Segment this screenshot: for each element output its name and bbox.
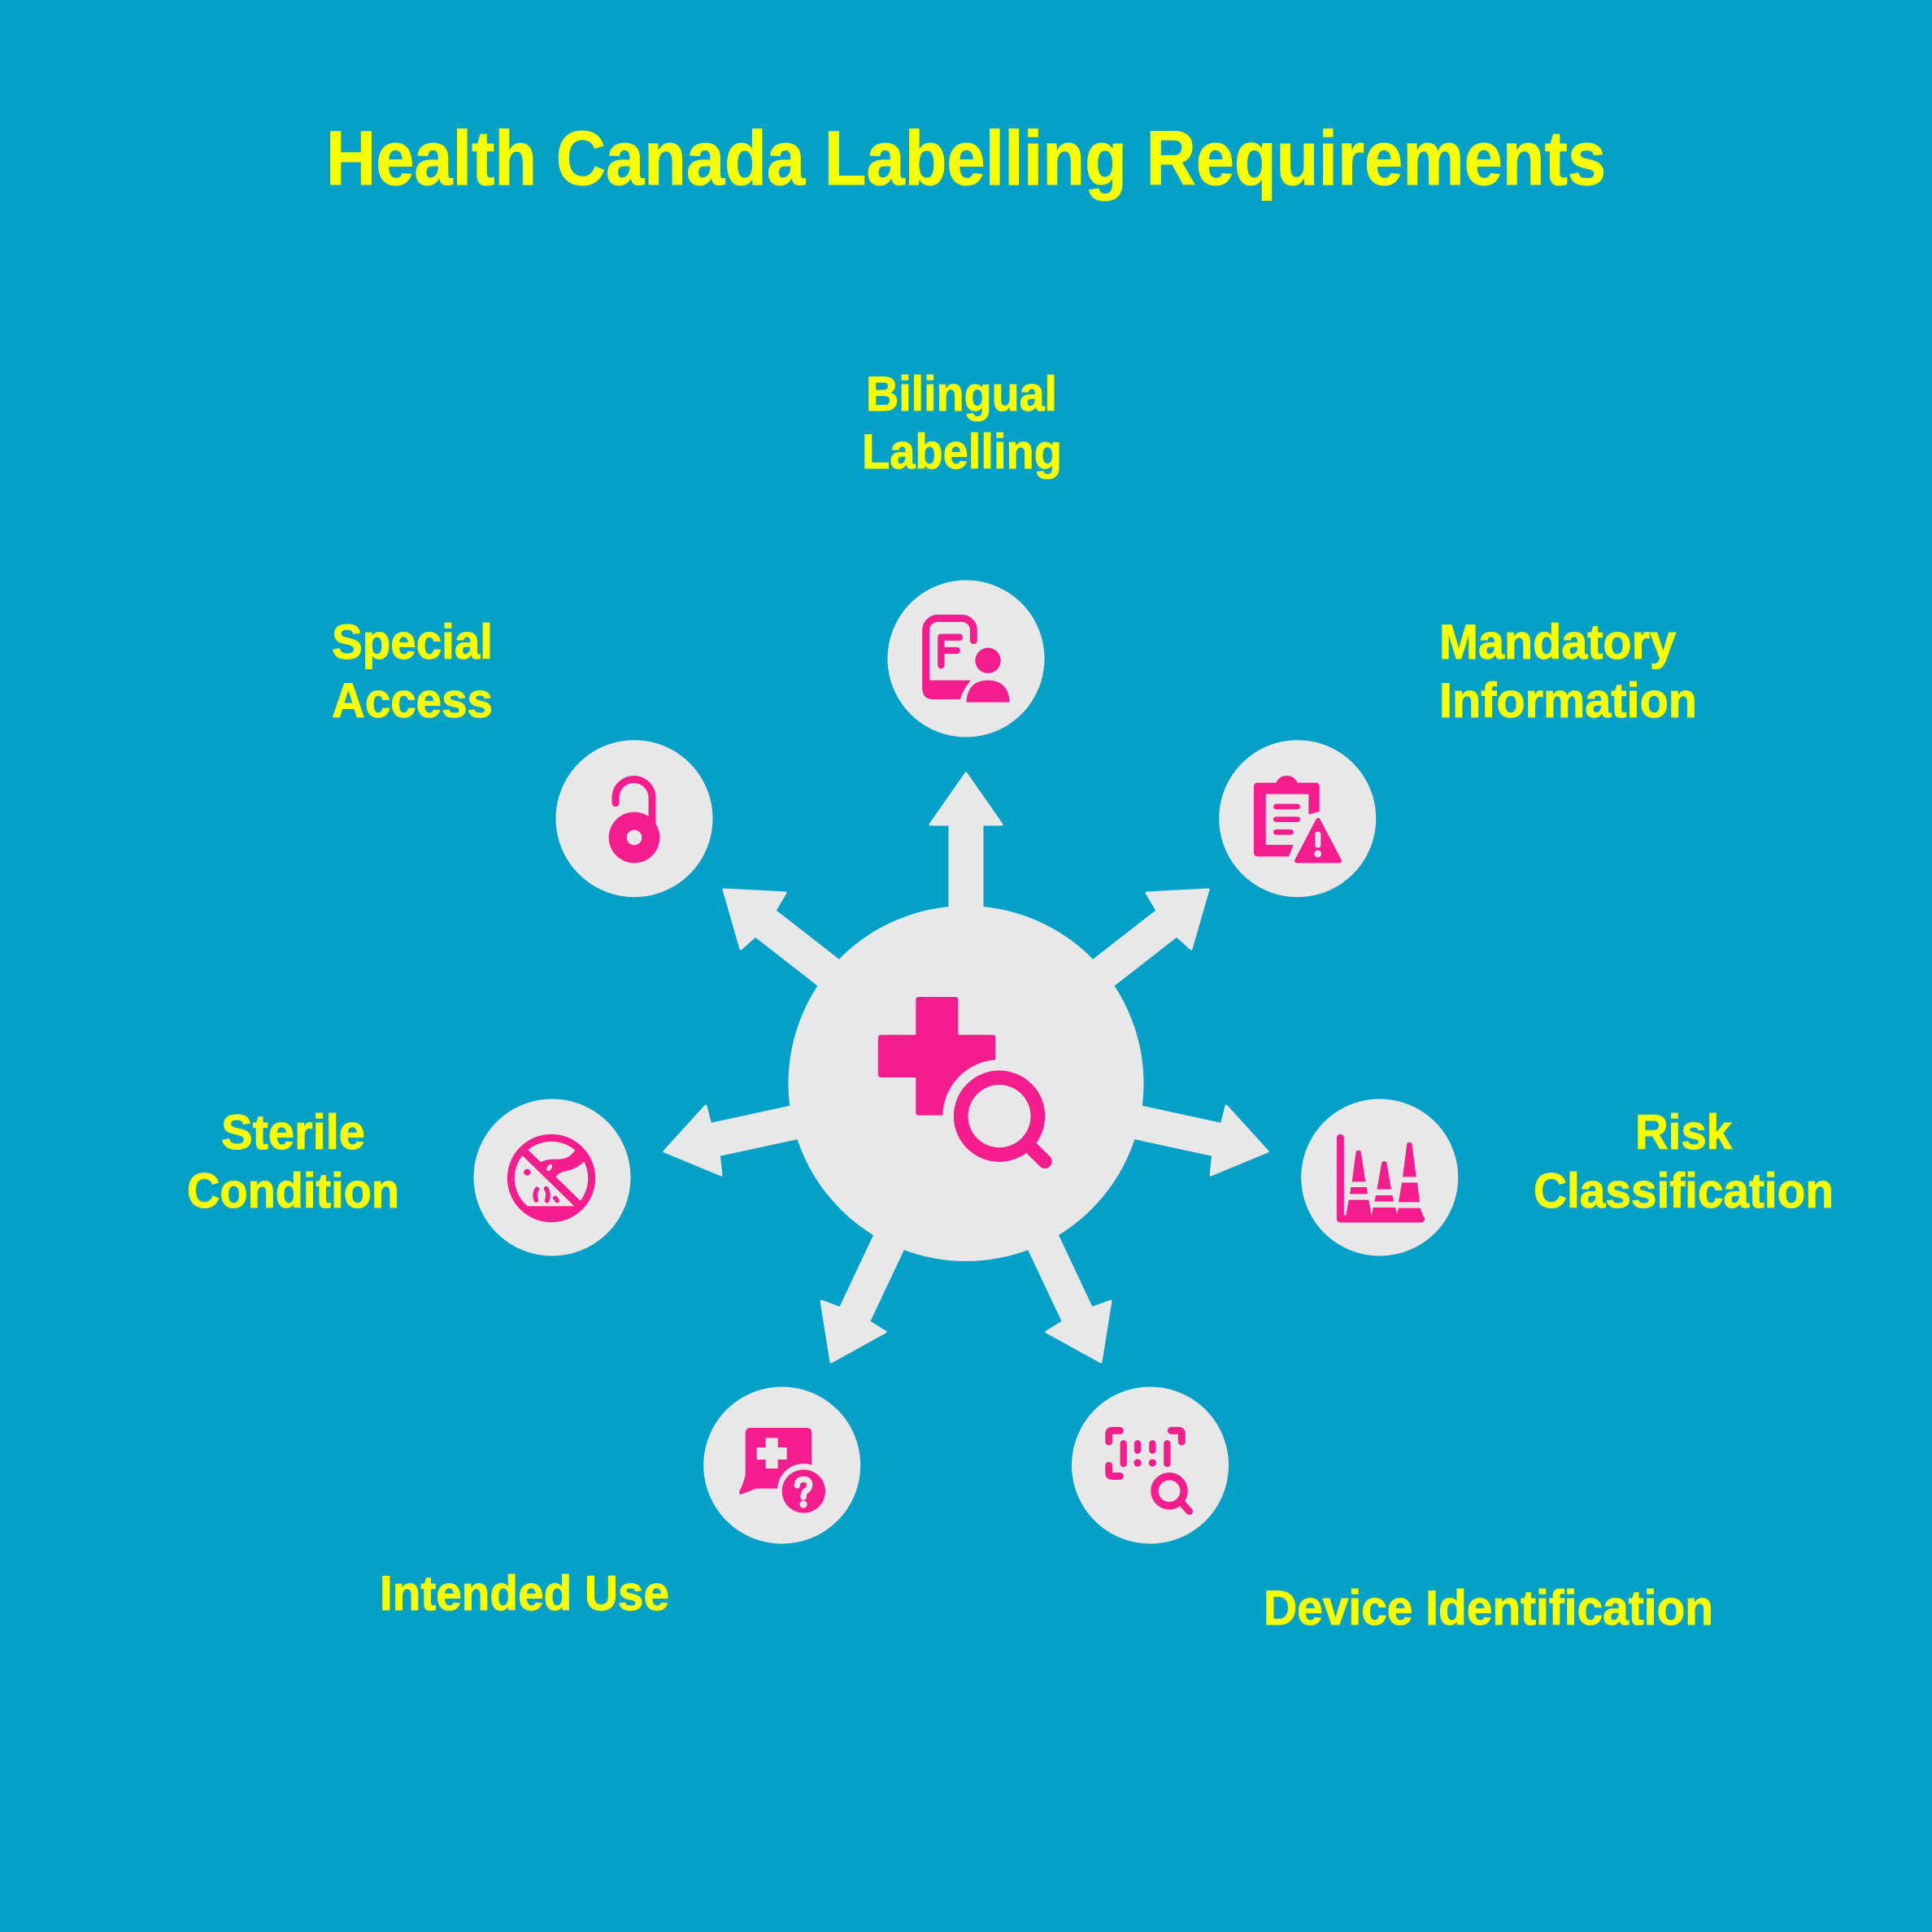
icon: open padlock bbox=[609, 779, 659, 863]
label: sterile condition bbox=[187, 1105, 399, 1218]
node: sterile condition bbox=[473, 1099, 631, 1255]
label: special access: Special bbox=[332, 615, 493, 669]
icon: cone chart bbox=[1340, 1138, 1423, 1219]
arrow: lower left bbox=[821, 1236, 903, 1362]
label: sterile condition: Condition bbox=[187, 1164, 399, 1218]
node: special access bbox=[556, 740, 712, 897]
node circle bbox=[1301, 1099, 1458, 1255]
icon: prohibited sterile sign bbox=[511, 1138, 592, 1219]
central circle bbox=[790, 907, 1142, 1260]
node: device identification bbox=[1072, 1387, 1229, 1543]
node: risk classification bbox=[1301, 1099, 1458, 1255]
node circle bbox=[703, 1387, 860, 1543]
node: bilingual labelling bbox=[888, 581, 1044, 737]
label: risk classification: Risk bbox=[1635, 1105, 1733, 1160]
label: mandatory information: Information bbox=[1439, 673, 1697, 728]
arrow: up bbox=[930, 773, 1002, 915]
icon: medical speech bubble with question mark bbox=[739, 1428, 825, 1513]
node circle bbox=[473, 1099, 631, 1255]
icon: medical cross with magnifier bbox=[878, 997, 1045, 1161]
icon: document with F and person bbox=[922, 618, 1010, 703]
node circle bbox=[556, 740, 712, 897]
label: special access: Access bbox=[332, 673, 493, 728]
label: bilingual labelling: Bilingual bbox=[866, 367, 1057, 421]
arrow: right bbox=[1134, 1106, 1268, 1175]
cross bbox=[878, 997, 995, 1116]
label: bilingual labelling: Labelling bbox=[862, 424, 1062, 479]
node: mandatory information bbox=[1219, 740, 1376, 897]
label: mandatory information: Mandatory bbox=[1439, 615, 1677, 669]
arrow: upper right bbox=[1094, 890, 1208, 985]
arrow: lower right bbox=[1029, 1236, 1111, 1362]
icon: clipboard with warning bbox=[1254, 776, 1339, 861]
icon: barcode with magnifier bbox=[1109, 1430, 1190, 1512]
magnifier bbox=[961, 1077, 1045, 1161]
title: Health Canada Labelling Requirements bbox=[326, 115, 1606, 202]
label: risk classification bbox=[1534, 1105, 1834, 1218]
arrow: left bbox=[664, 1106, 798, 1175]
node circle bbox=[1072, 1387, 1229, 1543]
arrow: upper left bbox=[724, 890, 838, 985]
label: risk classification: Classification bbox=[1534, 1164, 1834, 1218]
label: bilingual labelling bbox=[862, 367, 1062, 479]
node circle bbox=[1219, 740, 1376, 897]
label: device identification: Device Identification bbox=[1264, 1581, 1713, 1635]
label: special access bbox=[332, 615, 493, 728]
label: sterile condition: Sterile bbox=[221, 1105, 365, 1160]
node circle bbox=[888, 581, 1044, 737]
hub diagram: central circle with arrows bbox=[664, 773, 1268, 1362]
node: intended use bbox=[703, 1387, 860, 1543]
label: intended use: Intended Use bbox=[380, 1566, 669, 1621]
label: mandatory information bbox=[1439, 615, 1697, 728]
